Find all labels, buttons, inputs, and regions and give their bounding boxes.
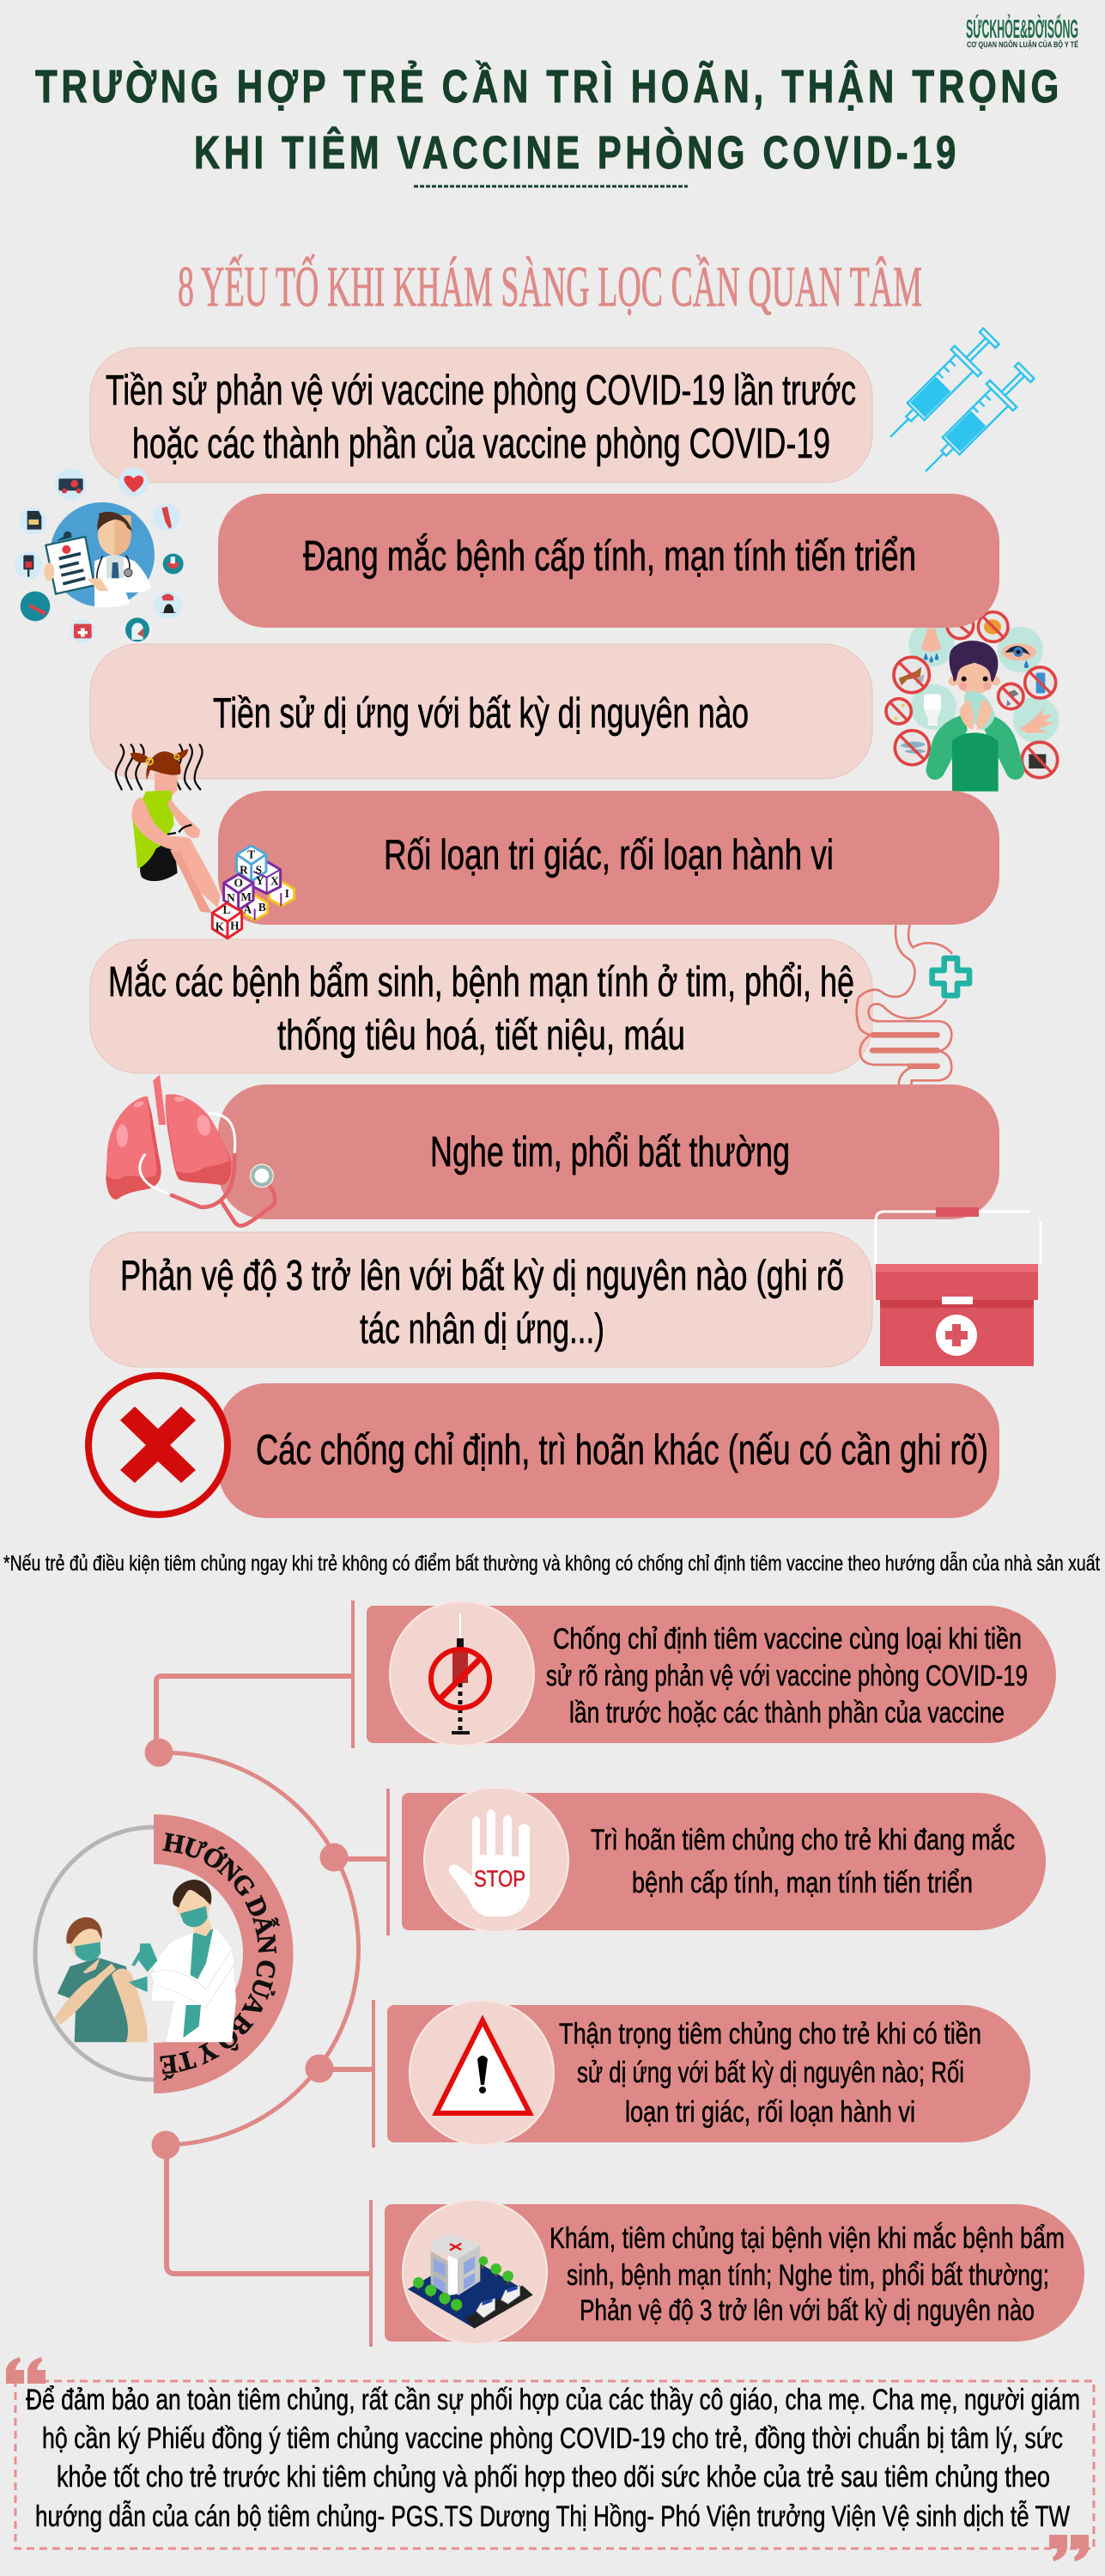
- icon: patient and nurse vaccination: HƯỚNG DẪN CỦA BỘ Y TẾ: [160, 1832, 280, 2081]
- icon: girl with toy blocks: S: [256, 864, 262, 877]
- icon: patient and nurse vaccination: [33, 1814, 294, 2093]
- icon: girl with toy blocks: O: [234, 877, 243, 890]
- panel: factor 3: Tiền sử dị ứng với bất kỳ dị nguyên nào: [213, 690, 749, 737]
- panel: factor 5: [90, 939, 872, 1073]
- icon: opening quote mark: [6, 2357, 46, 2384]
- icon: syringes: [877, 323, 1040, 485]
- icon: girl with toy blocks: N: [227, 891, 235, 904]
- panel: factor 6: [218, 1084, 999, 1219]
- panel: hospital: [385, 2200, 1084, 2344]
- panel: caution: [387, 2001, 1030, 2145]
- icon: stop hand: [449, 1809, 530, 1917]
- icon: warning triangle: [436, 2020, 530, 2113]
- icon: girl with toy blocks: K: [216, 920, 225, 933]
- panel: caution: Thận trọng tiêm chủng cho trẻ khi có tiền: [559, 2018, 981, 2050]
- panel: factor 1: [90, 348, 872, 483]
- panel: contraindicated: [367, 1601, 1056, 1746]
- title: [35, 60, 1063, 186]
- icon: hospital building: [408, 2234, 533, 2329]
- icon: closing quote mark: [1049, 2535, 1089, 2561]
- icon: girl with toy blocks: A: [243, 902, 252, 915]
- icon: girl with toy blocks: M: [240, 890, 252, 903]
- icon: first aid box: [876, 1207, 1041, 1366]
- panel: factor 3: [90, 644, 872, 779]
- panel: factor 5: thống tiêu hoá, tiết niệu, máu: [277, 1012, 685, 1059]
- icon: crossed-out syringe: [431, 1613, 489, 1733]
- icon: digestive system: [857, 926, 969, 1086]
- panel: caution: sử dị ứng với bất kỳ dị nguyên nào; Rối: [577, 2057, 964, 2089]
- icon: girl with toy blocks: I: [285, 887, 289, 900]
- panel: factor 5: Mắc các bệnh bẩm sinh, bệnh mạn tính ở tim, phổi, hệ: [108, 959, 854, 1005]
- icon: girl with toy blocks: T: [247, 848, 255, 860]
- panel: factor 7: tác nhân dị ứng...): [360, 1306, 604, 1352]
- logo: [966, 13, 1078, 49]
- panel: factor 4: Rối loạn tri giác, rối loạn hành vi: [384, 832, 834, 878]
- logo: CƠ QUAN NGÔN LUẬN CỦA BỘ Y TẾ: [967, 39, 1078, 49]
- icon: girl with toy blocks: Y: [256, 874, 264, 887]
- icon: girl with toy blocks: X: [270, 875, 279, 888]
- quote box: [15, 2381, 1094, 2549]
- panel: factor 2: Đang mắc bệnh cấp tính, mạn tính tiến triển: [303, 533, 916, 580]
- icon: girl with toy blocks: H: [230, 919, 240, 932]
- icon: girl with toy blocks: R: [240, 864, 248, 877]
- panel: caution: loạn tri giác, rối loạn hành vi: [625, 2096, 915, 2129]
- panel: factor 8: [218, 1383, 999, 1518]
- panel: factor 7: [90, 1232, 872, 1367]
- icon: red cross mark: [88, 1376, 228, 1515]
- icon: stop hand: STOP: [474, 1866, 525, 1892]
- panel: factor 2: [218, 494, 999, 628]
- panel: factor 1: hoặc các thành phần của vaccine phòng COVID-19: [132, 421, 830, 467]
- icon: girl with toy blocks: B: [258, 901, 266, 914]
- connector diagram: [144, 1601, 388, 2347]
- panel: postpone: [402, 1788, 1046, 1932]
- panel: factor 4: [218, 791, 999, 925]
- panel: factor 6: Nghe tim, phổi bất thường: [430, 1129, 790, 1176]
- icon: allergic man: [886, 612, 1059, 792]
- icon: lungs with stethoscope: [106, 1075, 275, 1225]
- panel: postpone: bệnh cấp tính, mạn tính tiến triển: [632, 1867, 973, 1899]
- icon: doctor with clipboard: [15, 467, 184, 643]
- icon: girl with toy blocks: L: [223, 903, 231, 916]
- icon: girl with toy blocks: [116, 744, 294, 939]
- panel: factor 7: Phản vệ độ 3 trở lên với bất kỳ dị nguyên nào (ghi rõ: [120, 1253, 844, 1299]
